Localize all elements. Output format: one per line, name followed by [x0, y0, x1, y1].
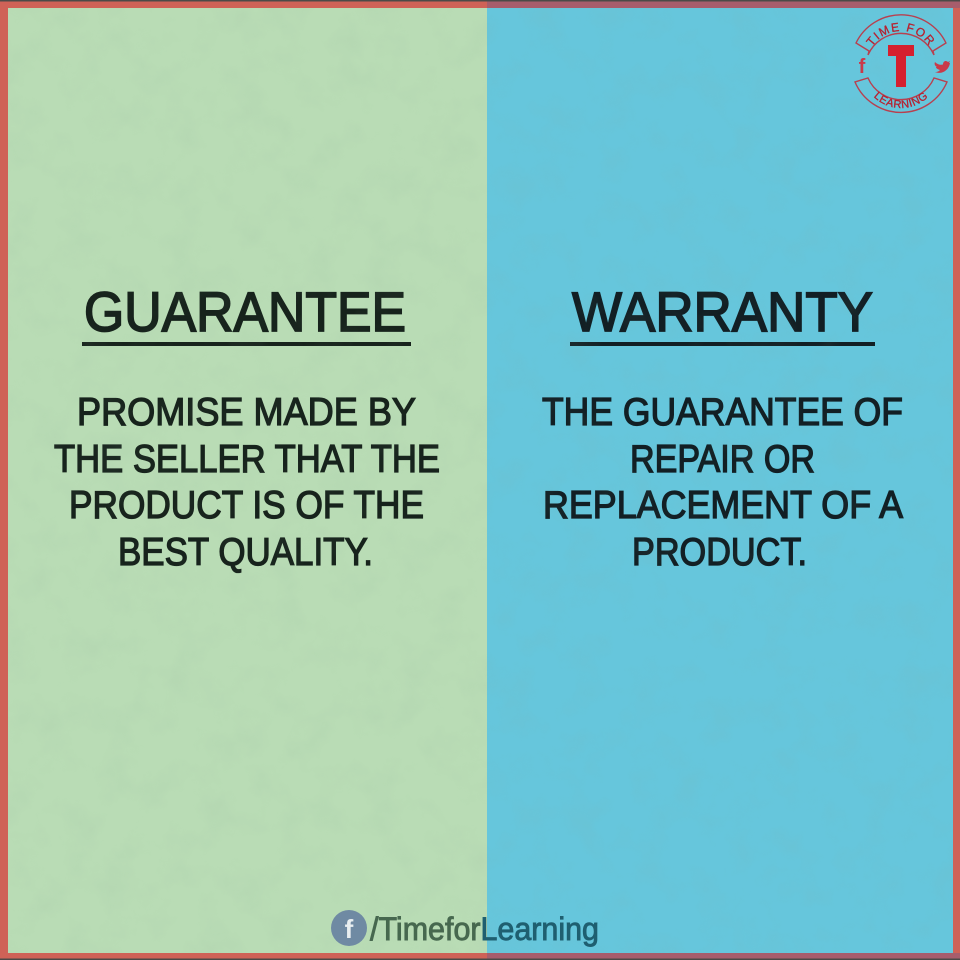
logo T [888, 45, 914, 87]
text block: guarantee definition: PRODUCT IS OF THE [69, 484, 424, 527]
logo: time for learning [854, 14, 950, 114]
logo twitter bird [935, 61, 950, 73]
text block: guarantee definition: THE SELLER THAT THE [54, 438, 440, 481]
panel: warranty [487, 8, 953, 953]
logo banner top text: TIME FOR [866, 22, 934, 46]
handle text: /TimeforLearning [370, 911, 599, 947]
panel: guarantee [8, 8, 487, 953]
heading: guarantee: GUARANTEE [84, 280, 406, 343]
text block: guarantee definition [54, 391, 440, 574]
logo banner bottom text: LEARNING [874, 92, 927, 108]
text block: guarantee definition: PROMISE MADE BY [77, 391, 416, 434]
text block: warranty definition: REPLACEMENT OF A [543, 484, 903, 527]
logo ribbons [855, 15, 947, 112]
text block: warranty definition [542, 391, 903, 574]
logo facebook f: f [859, 56, 866, 78]
icon: facebook: f [345, 914, 354, 944]
footer handle [331, 910, 599, 947]
text block: guarantee definition: BEST QUALITY. [118, 531, 373, 574]
text block: warranty definition: THE GUARANTEE OF [542, 391, 903, 434]
heading: warranty: WARRANTY [572, 280, 873, 343]
text block: warranty definition: REPAIR OR [630, 438, 815, 481]
text block: warranty definition: PRODUCT. [632, 531, 807, 574]
icon: facebook [331, 910, 367, 946]
